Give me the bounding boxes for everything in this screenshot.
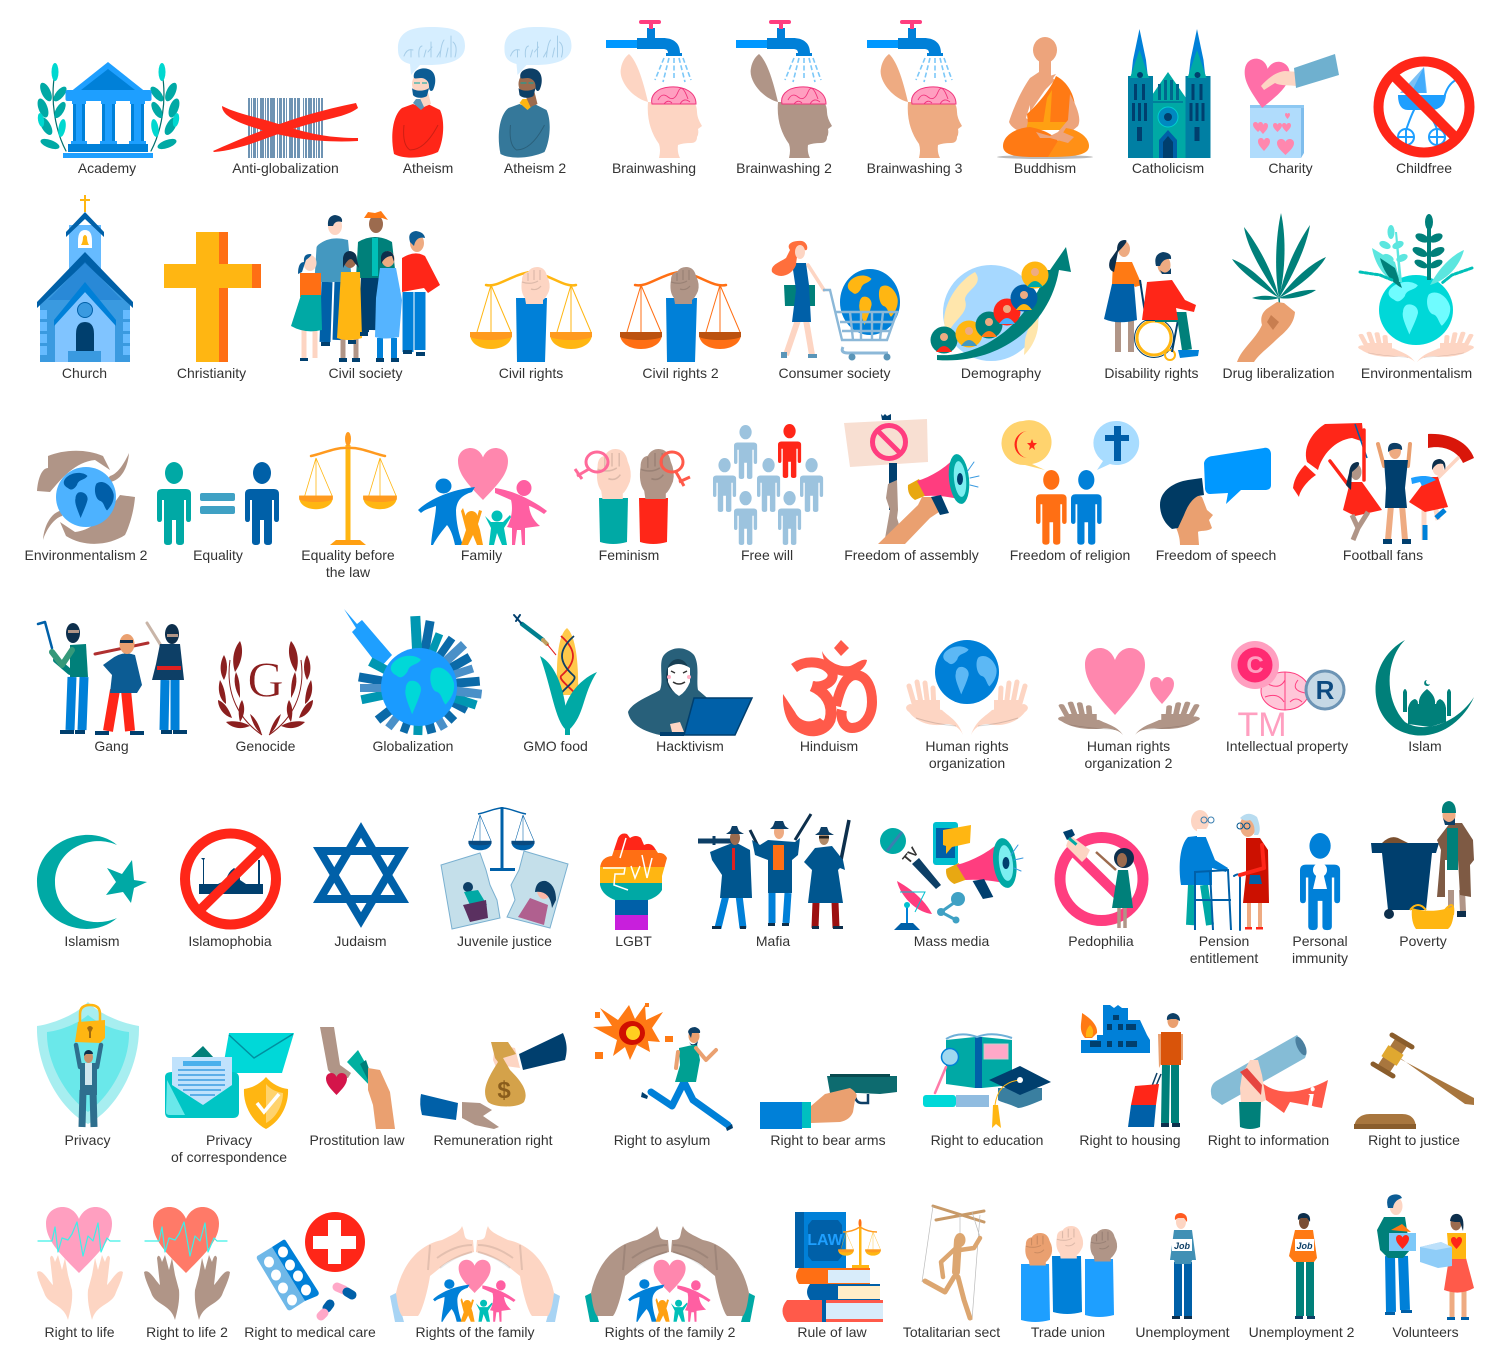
label: LGBT — [615, 933, 652, 949]
label line 2: the law — [326, 564, 371, 580]
item: Intellectual property — [1226, 641, 1348, 754]
item: Human rights organization — [906, 640, 1028, 771]
item: Brainwashing — [606, 20, 702, 176]
icon: copyright, brain, registered, trademark: TM — [1237, 706, 1287, 744]
item: Genocide — [218, 641, 313, 754]
label: Atheism 2 — [504, 160, 566, 176]
icon: elderly couple with walker and cane — [1180, 810, 1269, 930]
label: Right to life — [44, 1324, 115, 1340]
label: Remuneration right — [433, 1132, 553, 1148]
item: Equality before the law — [299, 432, 397, 580]
item: Drug liberalization — [1222, 213, 1335, 381]
item: Consumer society — [772, 241, 900, 381]
label: Environmentalism — [1361, 365, 1472, 381]
label: Anti-globalization — [232, 160, 339, 176]
label: Hacktivism — [656, 738, 724, 754]
label line 2: organization — [929, 755, 1005, 771]
label: Right to bear arms — [770, 1132, 886, 1148]
label: Rights of the family — [415, 1324, 535, 1340]
label: Brainwashing 3 — [867, 160, 963, 176]
item: Christianity — [164, 232, 261, 381]
icon: three gangsters with guns — [698, 814, 849, 929]
label: Trade union — [1031, 1324, 1105, 1340]
icon: hand holding pistol — [760, 1074, 897, 1129]
icon: heart, pulse and open hands — [37, 1207, 123, 1320]
label: Brainwashing — [612, 160, 696, 176]
icon: wooden marionette — [922, 1206, 984, 1320]
item: Pension entitlement — [1180, 810, 1269, 966]
item: Gang — [38, 622, 187, 754]
item: Totalitarian sect — [903, 1206, 1000, 1340]
label: Gang — [94, 738, 129, 754]
item: Remuneration right — [420, 1033, 567, 1148]
item: Free will — [713, 424, 823, 563]
icon: medical cross, blister pack, capsules — [257, 1212, 365, 1316]
icon: person with keyhole — [1300, 833, 1340, 930]
icon: meditating monk — [997, 37, 1093, 159]
item: Right to life — [37, 1207, 123, 1340]
label: Freedom of speech — [1156, 547, 1276, 563]
icon: copyright, brain, registered, trademark: C — [1246, 652, 1264, 679]
item: Right to housing — [1079, 1005, 1183, 1148]
icon: crescent and mosque — [1376, 640, 1474, 736]
label: GMO food — [523, 738, 588, 754]
label: Drug liberalization — [1222, 365, 1335, 381]
icon: laurel wreath with G: G — [247, 651, 284, 707]
label: Christianity — [177, 365, 246, 381]
item: Pedophilia — [1060, 829, 1143, 949]
label: Rule of law — [797, 1324, 868, 1340]
item: Family — [418, 448, 547, 563]
icon: woman with job sign: Job — [1296, 1241, 1313, 1251]
item: Equality — [157, 462, 279, 563]
item: Judaism — [320, 830, 402, 949]
label line 2: organization 2 — [1085, 755, 1173, 771]
item: Disability rights — [1104, 240, 1199, 381]
label: Right to education — [931, 1132, 1043, 1148]
icon: cathedral — [1128, 29, 1210, 158]
item: Buddhism — [997, 37, 1093, 176]
icon: copyright, brain, registered, trademark — [1231, 641, 1344, 744]
icon: two people with faith bubbles — [1001, 420, 1139, 545]
icon: law book, scales, stacked books: LAW — [807, 1232, 844, 1249]
icon: heart in a donation box — [1240, 54, 1339, 158]
item: Brainwashing 3 — [867, 20, 963, 176]
label: Volunteers — [1392, 1324, 1459, 1340]
icon: church building — [37, 195, 133, 362]
label: Intellectual property — [1226, 738, 1348, 754]
label: Personal — [1292, 933, 1348, 949]
item: Islamophobia — [185, 834, 276, 949]
icon: man running from explosion — [593, 1003, 733, 1131]
icon: crossed stroller — [1378, 62, 1470, 152]
item: Islamism — [37, 835, 147, 949]
icon: man, trash bin and bag — [1371, 801, 1474, 929]
label: Family — [461, 547, 502, 563]
label: Charity — [1268, 160, 1313, 176]
item: Hacktivism — [628, 648, 752, 754]
item: GMO food — [514, 615, 597, 754]
label line 2: entitlement — [1190, 950, 1258, 966]
item: Rights of the family — [390, 1226, 560, 1340]
label: Hinduism — [800, 738, 858, 754]
label: Childfree — [1396, 160, 1452, 176]
item: Charity — [1240, 54, 1339, 176]
icon: mic, phone, megaphone, dish — [880, 822, 1023, 930]
item: Privacy of correspondence — [165, 1033, 294, 1165]
icon: two volunteers exchanging boxes — [1377, 1194, 1474, 1320]
label: Environmentalism 2 — [25, 547, 148, 563]
item: Right to bear arms — [760, 1074, 897, 1148]
label: Disability rights — [1104, 365, 1199, 381]
label: Unemployment 2 — [1249, 1324, 1355, 1340]
label: Demography — [961, 365, 1041, 381]
icon: head with speech bubble — [1160, 448, 1271, 545]
icon: envelopes, letter and shield — [165, 1033, 294, 1129]
label: Freedom of assembly — [844, 547, 979, 563]
item: Demography — [930, 247, 1071, 381]
item: Mass media — [880, 822, 1023, 949]
icon: hands sheltering family — [390, 1226, 560, 1322]
icon: Om symbol — [783, 640, 872, 736]
label: Freedom of religion — [1010, 547, 1130, 563]
item: Civil rights 2 — [620, 267, 741, 381]
item: Anti-globalization — [213, 103, 358, 176]
icon: group of six people — [291, 211, 440, 362]
label line 2: immunity — [1292, 950, 1348, 966]
icon: star of David — [320, 830, 402, 920]
item: Poverty — [1371, 801, 1474, 949]
item: Right to medical care — [244, 1212, 376, 1340]
icon: two raised fists with symbols — [575, 449, 690, 544]
item: Right to justice — [1354, 1035, 1474, 1148]
item: Personal immunity — [1292, 833, 1348, 966]
label: Poverty — [1399, 933, 1447, 949]
label: Genocide — [236, 738, 296, 754]
icon: hooded hacker with laptop — [628, 648, 752, 736]
icon: hands holding globe — [906, 640, 1028, 735]
item: Unemployment 2 — [1249, 1213, 1355, 1340]
icon: hands exchanging money and heart — [320, 1027, 395, 1129]
item: LGBT — [600, 834, 667, 946]
label: Civil society — [329, 365, 402, 381]
item: Freedom of religion — [1001, 420, 1139, 563]
item: Volunteers — [1377, 1194, 1474, 1340]
icon: globe ringed by city buildings — [344, 609, 482, 735]
item: Environmentalism 2 — [25, 451, 148, 563]
item: Freedom of assembly — [844, 414, 979, 563]
icon: tap over open head, brown — [736, 20, 832, 158]
label: Free will — [741, 547, 793, 563]
label: Pension — [1199, 933, 1249, 949]
icon: mic, phone, megaphone, dish: TV — [899, 844, 922, 867]
icon: copyright, brain, registered, trademark: R — [1316, 675, 1335, 705]
icon: book, magnifier, cap — [923, 1034, 1051, 1128]
icon: brown fist holding scales — [620, 267, 741, 362]
icon: academy temple with laurels — [35, 62, 182, 158]
icon: shield, lock and man — [37, 1002, 139, 1127]
icon: globe held by brown hands — [37, 451, 135, 544]
label: Consumer society — [778, 365, 891, 381]
icon: cheering fans with scarves — [1293, 423, 1474, 544]
label: Juvenile justice — [457, 933, 552, 949]
icon: red heart, pulse and brown hands — [144, 1207, 230, 1320]
icon: hand holding cannabis leaf — [1232, 213, 1326, 362]
item: Rule of law — [782, 1212, 883, 1340]
label: Feminism — [599, 547, 659, 563]
icon: family under heart — [418, 448, 547, 545]
label: Right to life 2 — [146, 1324, 228, 1340]
icon: burning house and refugee — [1081, 1005, 1183, 1127]
item: Football fans — [1293, 423, 1474, 563]
icon: gavel and block — [1354, 1035, 1474, 1129]
label: Islamism — [64, 933, 120, 949]
icon: globe, growth arrow and faces — [930, 247, 1071, 361]
icon: woman and man in wheelchair — [1104, 240, 1199, 360]
label: Human rights — [1087, 738, 1170, 754]
icon: crescent and star — [37, 835, 147, 929]
item: Juvenile justice — [441, 807, 568, 949]
label: Civil rights 2 — [642, 365, 719, 381]
item: Mafia — [698, 814, 849, 949]
item: Trade union — [1021, 1226, 1117, 1340]
icon: money bag between hands: $ — [497, 1077, 511, 1104]
item: Privacy — [37, 1002, 139, 1148]
label: Civil rights — [499, 365, 563, 381]
label: Atheism — [403, 160, 453, 176]
label: Rights of the family 2 — [605, 1324, 736, 1340]
label: Globalization — [373, 738, 453, 754]
icon: rainbow fist — [600, 834, 667, 930]
item: Environmentalism — [1358, 214, 1474, 381]
icon: protest sign and megaphone — [844, 414, 979, 544]
item: Academy — [35, 62, 182, 176]
item: Atheism — [392, 27, 465, 176]
label: Academy — [78, 160, 136, 176]
icon: globe with plants and hands — [1358, 214, 1474, 362]
item: Islam — [1376, 640, 1474, 754]
icon: tap over open head — [606, 20, 702, 158]
label: Right to asylum — [614, 1132, 710, 1148]
item: Rights of the family 2 — [585, 1226, 755, 1340]
icon: three masked men — [38, 622, 187, 735]
item: Right to asylum — [593, 1003, 733, 1148]
item: Freedom of speech — [1156, 448, 1276, 563]
label: Unemployment — [1135, 1324, 1230, 1340]
item: Catholicism — [1128, 29, 1210, 176]
icon: two people and equals sign — [157, 462, 279, 545]
label: Judaism — [334, 933, 387, 949]
label: Equality before — [301, 547, 395, 563]
icon: shopper with globe in cart — [772, 241, 900, 360]
icon: crossed hand and girl — [1060, 829, 1143, 928]
item: Hinduism — [783, 640, 872, 754]
label line 2: of correspondence — [171, 1149, 287, 1165]
icon: tap over open head, tan — [867, 20, 962, 158]
icon: golden scales — [299, 432, 397, 545]
label: Prostitution law — [310, 1132, 405, 1148]
label: Pedophilia — [1068, 933, 1134, 949]
label: Catholicism — [1132, 160, 1204, 176]
icon: crowd with one red person — [713, 424, 823, 545]
icon: thinking man in red — [392, 27, 465, 158]
label: Right to justice — [1368, 1132, 1460, 1148]
label: Islamophobia — [188, 933, 272, 949]
icon: cross — [164, 232, 261, 362]
label: Buddhism — [1014, 160, 1076, 176]
item: Childfree — [1378, 62, 1470, 176]
icon: corn with DNA and syringe — [514, 615, 597, 735]
item: Unemployment — [1135, 1213, 1230, 1340]
icon: money bag between hands — [420, 1033, 567, 1129]
label: Right to housing — [1079, 1132, 1181, 1148]
icon: scales over torn photo — [441, 807, 568, 929]
item: Atheism 2 — [499, 27, 572, 176]
icon: fist holding scales — [470, 267, 592, 362]
label: Equality — [193, 547, 243, 563]
icon: three raised fists — [1021, 1226, 1117, 1322]
icon: brown hands sheltering family — [585, 1226, 755, 1322]
item: Brainwashing 2 — [736, 20, 832, 176]
item: Right to information — [1208, 1035, 1329, 1148]
label: Human rights — [925, 738, 1009, 754]
label: Mafia — [756, 933, 790, 949]
label: Mass media — [914, 933, 989, 949]
icon: crossed mosque — [185, 834, 276, 924]
label: Islam — [1408, 738, 1442, 754]
item: Prostitution law — [310, 1027, 405, 1148]
item: Globalization — [344, 609, 482, 754]
label: Right to medical care — [244, 1324, 376, 1340]
label: Church — [62, 365, 107, 381]
icon: brown hands with hearts — [1058, 648, 1200, 735]
label: Football fans — [1343, 547, 1423, 563]
label: Totalitarian sect — [903, 1324, 1000, 1340]
item: Church — [37, 195, 133, 381]
icon: thinking man in blue — [499, 27, 572, 158]
item: Right to education — [923, 1034, 1051, 1148]
label: Privacy — [65, 1132, 110, 1148]
icon: crossed barcode — [213, 103, 358, 152]
icon: man with job sign: Job — [1174, 1241, 1190, 1251]
label: Right to information — [1208, 1132, 1329, 1148]
item: Civil rights — [470, 267, 592, 381]
item: Human rights organization 2 — [1058, 648, 1200, 771]
label: Brainwashing 2 — [736, 160, 832, 176]
icon: hand with scroll and info banner: i — [1307, 1083, 1315, 1114]
item: Feminism — [575, 449, 690, 563]
item: Right to life 2 — [144, 1207, 230, 1340]
item: Civil society — [291, 211, 440, 381]
label: Privacy — [206, 1132, 252, 1148]
